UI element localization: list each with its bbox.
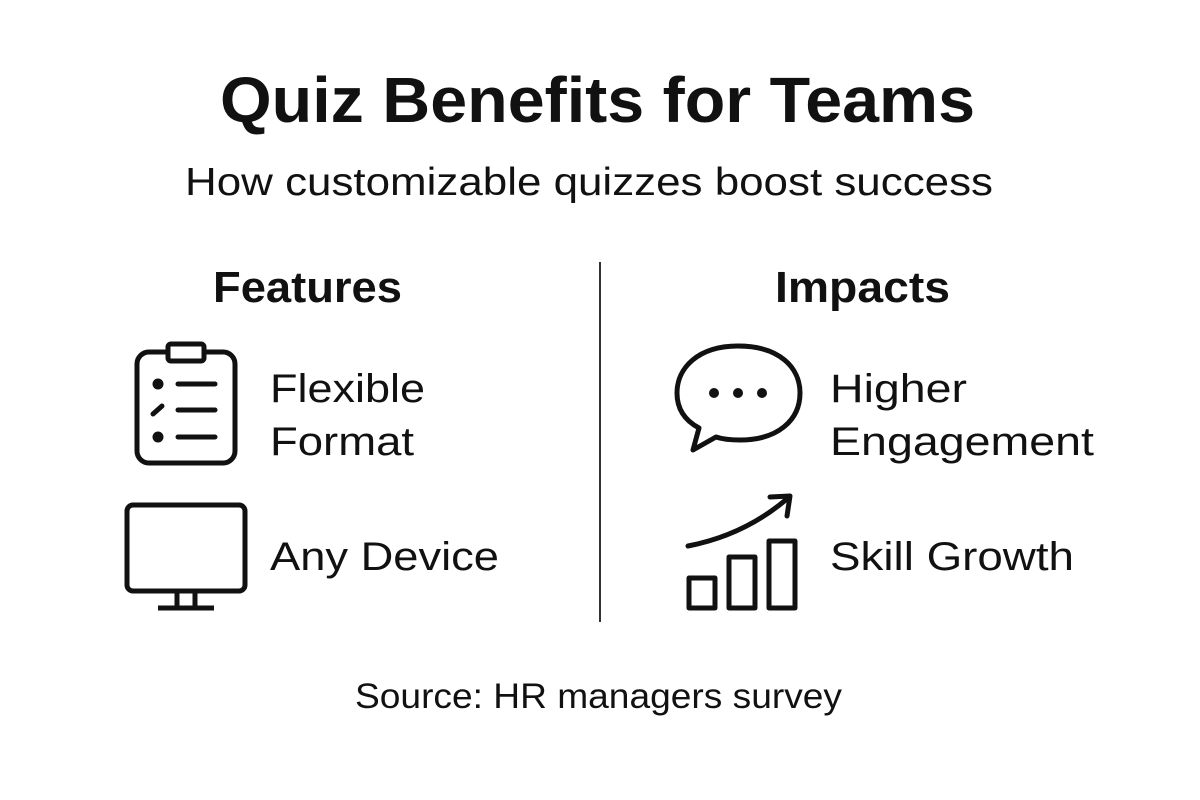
icon: speech bubble xyxy=(677,346,800,450)
icon: monitor xyxy=(127,505,245,608)
heading: Impacts: Impacts xyxy=(775,263,950,312)
source note: Source: HR managers survey xyxy=(355,677,843,716)
text: Flexible Format: Format xyxy=(270,420,414,464)
title: Quiz Benefits for Teams xyxy=(220,64,975,136)
icon: growth chart xyxy=(688,496,795,608)
text: Higher Engagement xyxy=(830,367,1094,464)
text: Skill Growth: Skill Growth xyxy=(830,535,1074,579)
text: Flexible Format: Flexible xyxy=(270,367,425,411)
heading: Features: Features xyxy=(213,263,402,312)
subtitle: How customizable quizzes boost success xyxy=(185,161,993,204)
text: Any Device: Any Device xyxy=(270,535,499,579)
icon: clipboard xyxy=(137,344,235,463)
text: Flexible Format xyxy=(270,367,425,464)
text: Higher Engagement: Engagement xyxy=(830,420,1094,464)
text: Higher Engagement: Higher xyxy=(830,367,967,411)
